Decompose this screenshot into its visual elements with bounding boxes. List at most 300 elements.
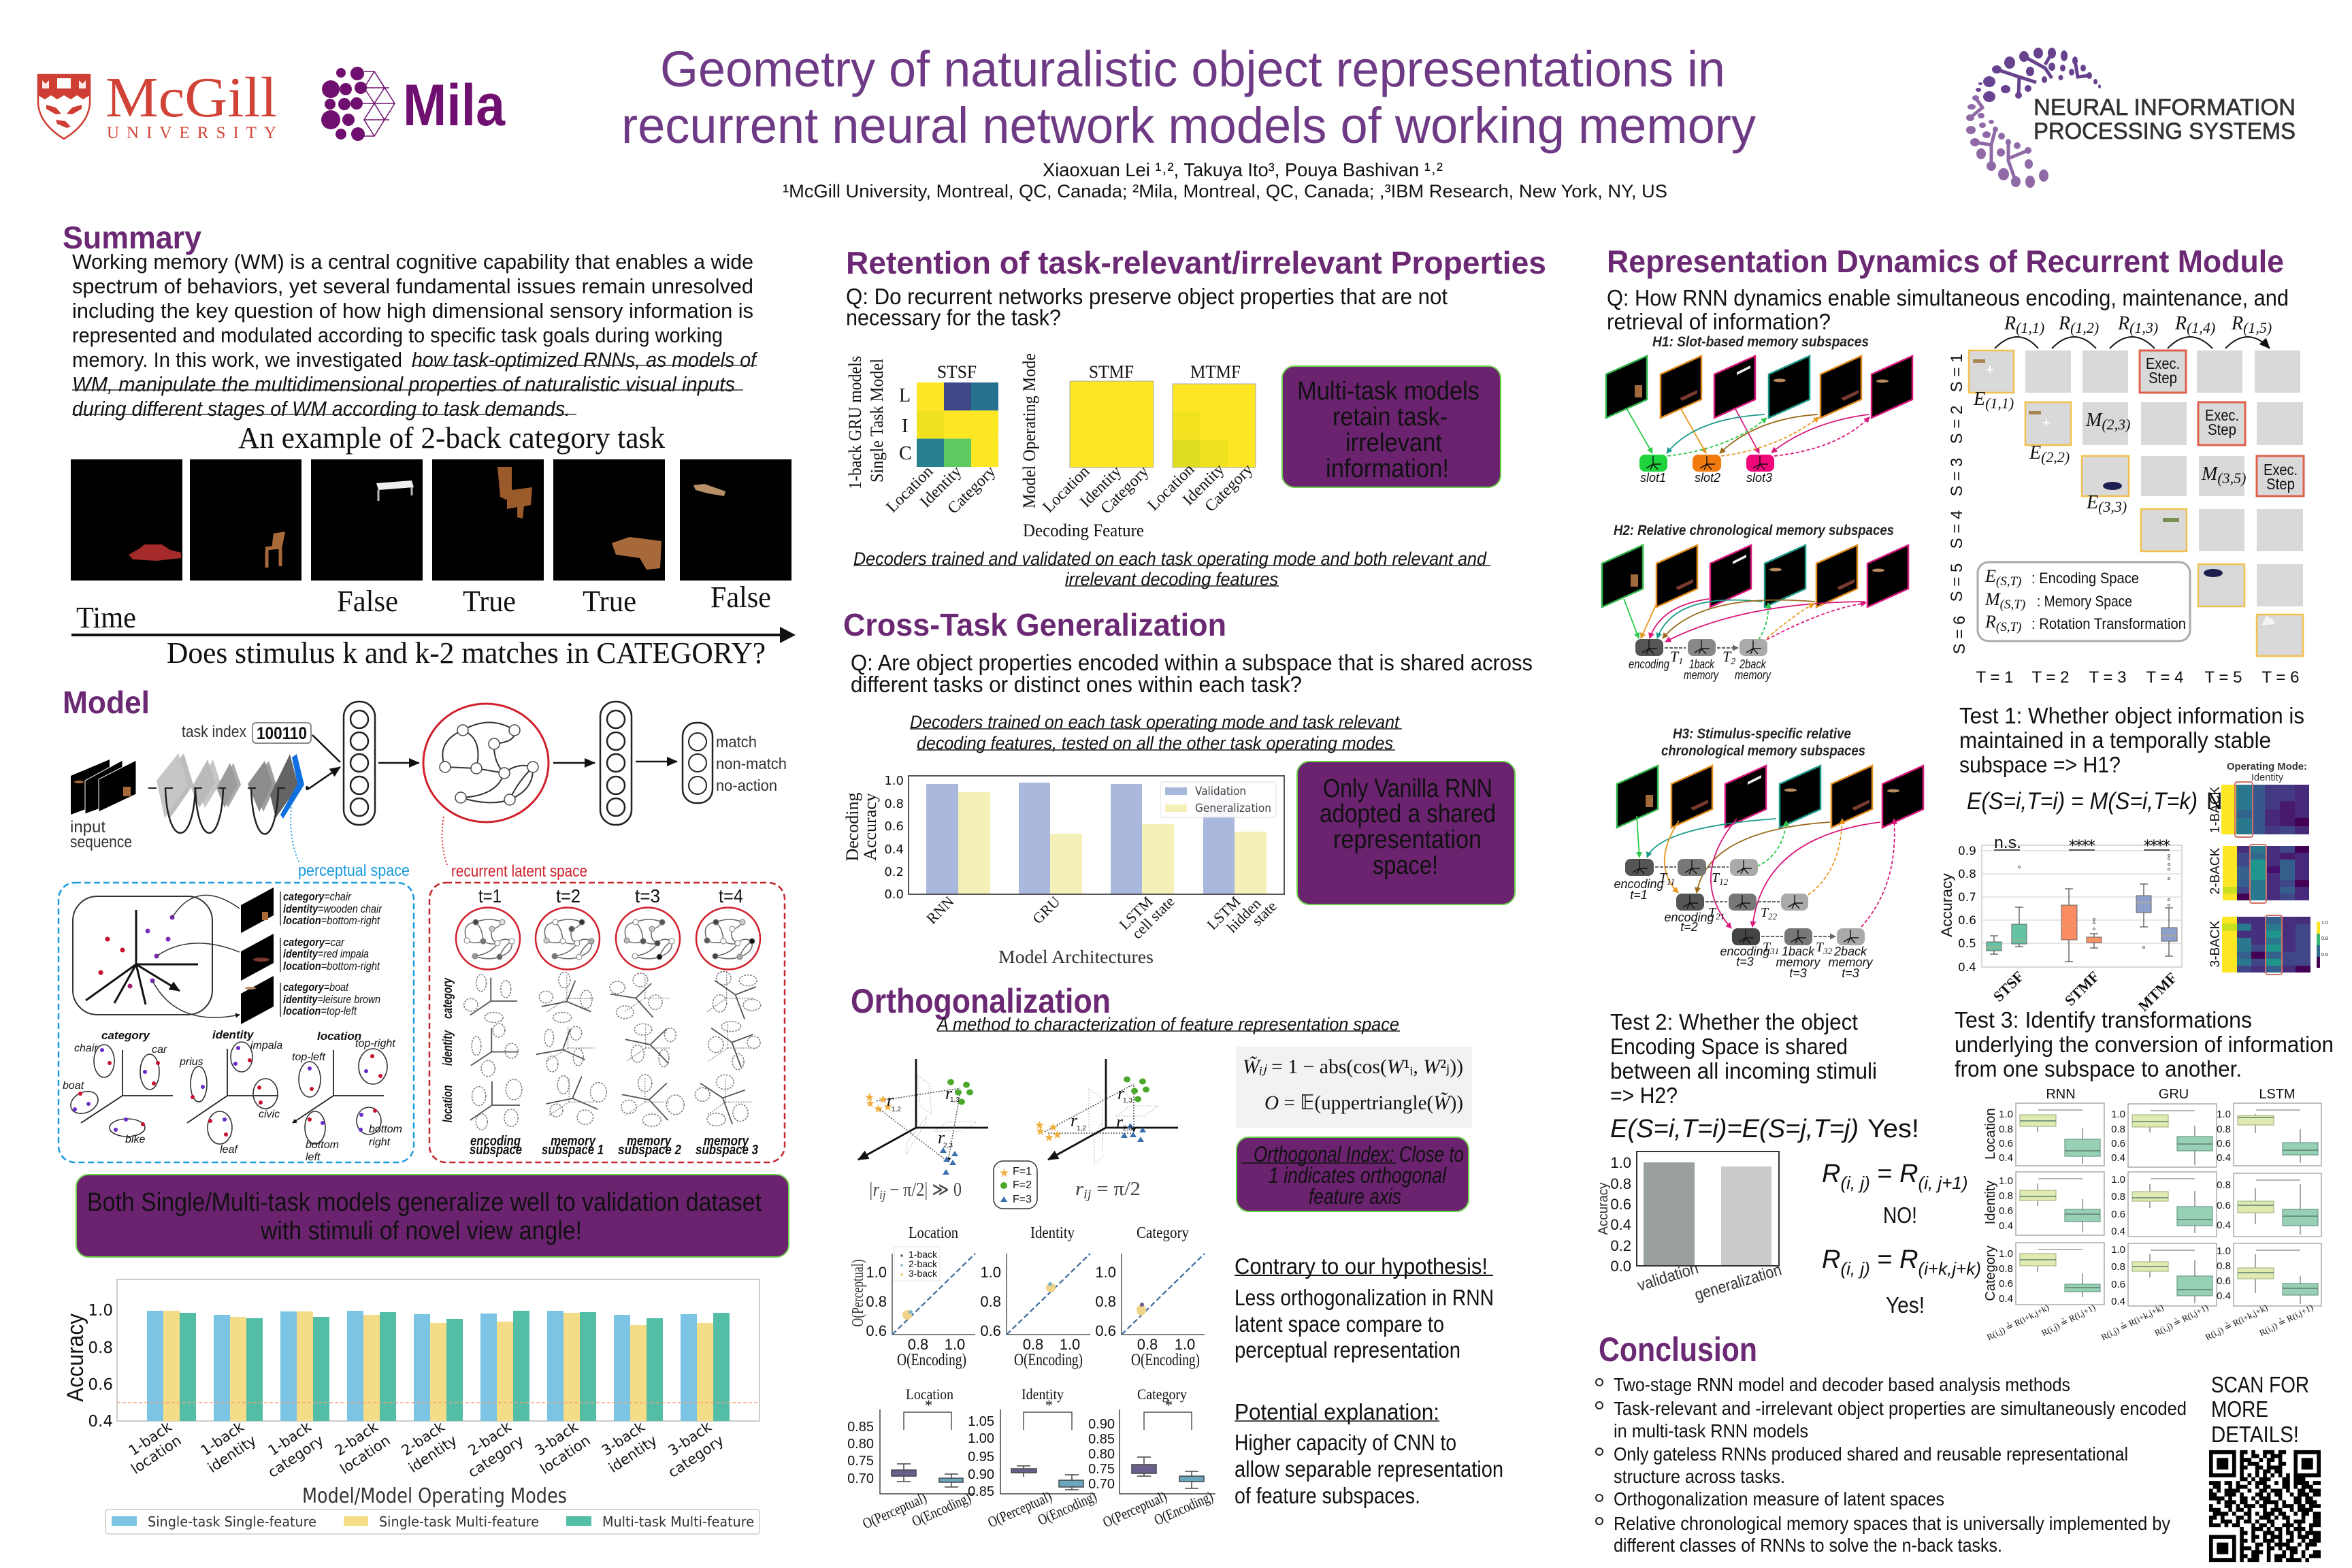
bar chart: validation vs generalization: 1.0 [1610,1154,1631,1171]
diagram: H2 relative chronological [1602,523,1908,682]
scatter plots: perceptual vs encoding: 0.8 [1023,1336,1043,1353]
box plots: perceptual vs encoding: 0.90 [968,1467,994,1482]
bar chart: accuracy by operating mode: category [265,1432,327,1481]
heatmaps: decoding per feature: Location [1040,463,1093,517]
time labels: T = 2 [2032,668,2069,687]
text block: summary body: represented and modulated according to specific task goals during working [72,323,723,347]
feature axes: category identity location: bike [125,1134,145,1145]
box plots: perceptual vs encoding: Identity [1022,1386,1064,1403]
bar chart: accuracy by operating mode: Model/Model Operating Modes [302,1484,567,1508]
bar chart: decoding accuracy by architecture: 0.6 [884,819,904,834]
formulas: rotation equalities [1822,1160,1981,1318]
bar chart: accuracy by operating mode [63,1279,760,1534]
bar chart: accuracy by operating mode: 2-back [399,1418,448,1459]
diagram: H1 slot-based: slot2 [1695,471,1720,485]
question: retention [846,284,1448,330]
callout: vanilla RNN: adopted a shared [1320,800,1496,828]
heatmap STSF [917,382,998,467]
QR code [2209,1452,2321,1560]
box plot grid: rotation transforms: R(i,j) ≟ R(i+k,j+k) [2204,1302,2269,1342]
box plots: perceptual vs encoding: 0.75 [1088,1462,1115,1477]
diagram: H3 stimulus-specific: 2back [1833,945,1867,958]
scatter plots: perceptual vs encoding: 1.0 [1060,1336,1080,1353]
text block: test 3: underlying the conversion of information [1955,1032,2334,1057]
feature axes: category identity location: location [317,1030,361,1043]
response labels and time arrow: Does stimulus k and k-2 matches in CATEGORY? [167,636,766,670]
diagram: H3 stimulus-specific: t=1 [1630,888,1648,902]
box plot grid: rotation transforms: R(i,j) ≟ R(i+k,j+k) [1985,1302,2051,1342]
diagram: non-orthogonal axes: ★ [864,1091,875,1104]
bar chart: validation vs generalization: 0.2 [1610,1237,1631,1254]
box plots: perceptual vs encoding: 0.90 [1088,1417,1115,1432]
scatter plots: perceptual vs encoding: 0.8 [866,1293,887,1310]
heading: example task: An example of 2-back category task [238,421,665,455]
diagram: H3 stimulus-specific: memory [1828,956,1873,969]
space labels: (2,3) [2102,416,2130,433]
bar chart: decoding accuracy by architecture: Decoding [843,792,862,862]
diagram: orthogonal axes: r [1075,1179,1083,1200]
heatmaps: decoding per feature: Decoding Feature [1023,521,1144,540]
heatmaps: decoding per feature: Model Operating Mode [1019,353,1039,508]
diagram: H3 stimulus-specific: T [1659,870,1667,885]
title [621,41,1756,154]
logo: Neural Information Processing Systems [1966,48,2296,188]
feature axes: category identity location: chair [74,1043,98,1054]
diagram: H2 relative chronological: memory [1735,668,1771,682]
task index: 100110 [257,724,307,743]
text block: potential explanation: Potential explanation: [1235,1399,1439,1424]
text block: summary body: spectrum of behaviors, yet several fundamental issues remain unresolved [72,274,753,298]
diagram: orthogonal axes: ★ [1048,1121,1058,1134]
output layer: match [716,733,757,751]
diagram: H3 stimulus-specific: encoding [1720,945,1770,958]
rotation labels [1995,313,2272,348]
heatmap 2-back [2223,846,2309,900]
box plot: temporal stability accuracy: 0.4 [1958,961,1976,975]
heatmaps: operating mode identity: Identity [2251,772,2283,783]
box plot grid: rotation transforms: Category [1983,1245,1998,1301]
panel: perceptual space: location=bottom-right [283,914,380,927]
rotation labels: R [2232,313,2243,334]
bar chart: accuracy by operating mode: identity [205,1432,259,1476]
bar chart: decoding accuracy by architecture: 0.2 [884,865,904,879]
space labels: (3,3) [2098,498,2127,515]
panel: recurrent latent space: t=4 [719,885,743,906]
scatter plots: perceptual vs encoding: O(Encoding) [897,1351,966,1369]
note: cross-task decoders: decoding features, tested on all the other task operating modes [917,733,1393,753]
panel: recurrent latent space: subspace [470,1143,522,1158]
box plot grid: rotation transforms [1983,1087,2321,1342]
bar chart: accuracy by operating mode: 3-back [532,1418,581,1459]
box plots: perceptual vs encoding: * [1045,1396,1053,1414]
diagram: H1 slot-based: slot3 [1746,471,1772,485]
conclusion bullets: Two-stage RNN model and decoder based analysis methods [1614,1374,2070,1395]
box plot grid: rotation transforms: 1.0 [2217,1109,2231,1120]
diagram: H3 stimulus-specific: 22 [1768,911,1778,921]
panel: recurrent latent space: t=1 [478,885,502,906]
note: decoders trained: irrelevant decoding features [1065,569,1278,589]
box plots: perceptual vs encoding: 0.85 [1088,1432,1115,1447]
logo: McGill University: McGill [105,66,277,129]
bar chart: decoding accuracy by architecture: RNN [923,893,958,927]
question: cross-task: Q: Are object properties encoded within a subspace that is shared across [851,650,1533,675]
diagram: non-orthogonal axes: 2,3 [943,1142,953,1149]
box plot grid: rotation transforms: 0.8 [2217,1179,2231,1191]
bar chart: accuracy by operating mode: location [537,1432,593,1477]
legend [105,1509,760,1534]
feature axes: category identity location: prius [179,1056,203,1068]
box plot grid: rotation transforms: 0.4 [1999,1220,2013,1232]
heading: Cross-Task Generalization: Cross-Task Generalization [843,607,1226,642]
bar chart: accuracy by operating mode: 1-back [126,1418,175,1459]
box plot grid: rotation transforms: 0.8 [2111,1261,2125,1273]
text block: test 1: Test 1: Whether object information is [1959,703,2304,728]
box plot: temporal stability accuracy: 0.7 [1958,891,1976,904]
heatmaps: operating mode identity [2208,761,2328,975]
diagram: orthogonal axes: = π/2 [1092,1179,1141,1200]
diagram: H3 stimulus-specific: T [1816,940,1823,955]
conclusion bullets: Only gateless RNNs produced shared and reusable representational [1614,1443,2128,1465]
scatter plots: perceptual vs encoding: O(Encoding) [1131,1351,1200,1369]
time labels: T = 1 [1976,668,2013,687]
heading: Summary: Summary [63,220,201,255]
text block: test 3 [1955,1007,2334,1081]
bar chart: accuracy by operating mode: 2-back [332,1418,381,1459]
time labels: T = 4 [2146,668,2183,687]
formulas: rotation equalities: = [1870,1245,1899,1274]
diagram: H3 stimulus-specific: T [1761,905,1768,920]
subspace geometry grid [464,971,761,1130]
panel: perceptual space [59,883,414,1163]
panel: recurrent latent space: t=3 [635,885,660,906]
bar chart: validation vs generalization: 0.6 [1610,1196,1631,1213]
callout: multi-task retain: retain task- [1333,403,1448,431]
space labels: (3,5) [2217,470,2246,487]
box plot grid: rotation transforms: 0.6 [1999,1138,2013,1149]
output layer [683,723,787,803]
note: decoders trained [853,549,1490,589]
panel: recurrent latent space: t=2 [556,885,581,906]
text block: test 3: from one subspace to another. [1955,1056,2242,1081]
panel: recurrent latent space: encoding [470,1134,521,1149]
feature axes: category identity location: category [101,1029,150,1042]
text block: summary body [72,250,758,421]
legend: F values: F=3 [1013,1194,1032,1205]
diagram: H3 stimulus-specific: memory [1776,956,1820,969]
callout: vanilla RNN: representation [1333,826,1482,854]
space legend: (S,T) [2000,598,2025,612]
diagram: H1 slot-based: H1: Slot-based memory subspaces [1652,334,1869,350]
callout: orthogonal index: feature axis [1309,1184,1401,1209]
bar chart: accuracy by operating mode: 2-back [466,1418,514,1459]
formula box: O = 𝔼(uppertriangle(W̃)) [1264,1092,1463,1114]
text block: contrary to hypothesis: Less orthogonalization in RNN [1235,1285,1494,1310]
diagram: H2 relative chronological: 2back [1739,657,1767,671]
panel: perceptual space: category=boat [283,981,349,994]
box plot grid: rotation transforms: 0.4 [2111,1152,2125,1164]
formula box: W̃ᵢⱼ = 1 − abs(cos(W¹ᵢ, W²ⱼ)) [1243,1056,1463,1078]
space labels: (1,1) [1985,395,2014,412]
diagram: orthogonal axes: ij [1083,1188,1092,1202]
scatter plots: perceptual vs encoding: Location [909,1224,958,1242]
box plot grid: rotation transforms: R(i,j) ≟ R(i,j+1) [2257,1302,2315,1338]
diagram: H2 relative chronological: T [1670,648,1678,665]
box plot grid: rotation transforms: 0.6 [1999,1205,2013,1217]
heatmaps: decoding per feature: Identity [1077,463,1125,511]
box plot: temporal stability accuracy: 0.8 [1958,868,1976,881]
heatmaps: decoding per feature: Category [945,463,999,517]
box plot grid: rotation transforms: 0.6 [2111,1279,2125,1290]
space legend: : Encoding Space [2031,570,2139,587]
space labels: E [2087,492,2098,513]
time labels: T = 3 [2089,668,2126,687]
scatter plots: perceptual vs encoding: 0.8 [980,1293,1001,1310]
box plot grid: rotation transforms: Location [1983,1108,1998,1160]
text block: potential explanation [1235,1399,1503,1508]
box plot: temporal stability accuracy: Accuracy [1938,873,1955,937]
box plot grid: rotation transforms: 0.8 [2111,1124,2125,1135]
note: cross-task decoders: Decoders trained on each task operating mode and task relevant [910,712,1400,732]
panel: recurrent latent space [429,883,785,1162]
box plots: perceptual vs encoding: 1.00 [968,1431,994,1446]
bar chart: decoding accuracy by architecture: 0.8 [884,797,904,811]
heatmaps: operating mode identity: 3-BACK [2208,920,2223,967]
bar chart: validation vs generalization: 0.4 [1610,1216,1631,1233]
box plot grid: rotation transforms: R(i,j) ≟ R(i+k,j+k) [2100,1302,2165,1342]
callout: multi-task retain: irrelevant [1345,429,1442,457]
diagram: non-orthogonal axes: |r [868,1179,881,1200]
affiliations: ¹McGill University, Montreal, QC, Canada; ²Mila, Montreal, QC, Canada; ,³IBM Research, New York, NY, US [783,181,1667,201]
latent network states t=1 to t=4 [456,908,760,969]
panel: perceptual space: identity=leisure brown [283,993,380,1006]
formulas: rotation equalities: R [1899,1160,1918,1188]
subheading: method: A method to characterization of feature representation space [936,1014,1399,1034]
diagram: H3 stimulus-specific: t=2 [1680,920,1698,934]
text block: summary body: Working memory (WM) is a central cognitive capability that enables a wide [72,250,753,274]
rotation labels: R [2059,313,2070,334]
legend: Generalization [1195,802,1271,815]
question: RNN dynamics: Q: How RNN dynamics enable simultaneous encoding, maintenance, and [1607,285,2289,310]
formulas: rotation equalities: R [1822,1245,1840,1274]
heatmaps: decoding per feature: Location [1145,461,1198,514]
text block: potential explanation: of feature subspaces. [1235,1483,1420,1508]
legend: F values: F=1 [1013,1166,1032,1177]
box plot grid: rotation transforms: 0.8 [2217,1124,2231,1135]
title: recurrent neural network models of working memory [621,97,1756,154]
text block: test 1: subspace => H1? [1959,752,2121,777]
diagram: H3 stimulus-specific: t=3 [1789,966,1807,980]
panel: recurrent latent space: memory [704,1134,749,1149]
formulas: rotation equalities: = [1870,1160,1899,1188]
scatter legend: 2-back [909,1258,938,1269]
response labels and time arrow: False [710,581,771,614]
callout: generalization: with stimuli of novel view angle! [260,1217,582,1245]
callout: orthogonal index [1237,1137,1469,1211]
box plot grid: rotation transforms: 0.8 [2217,1260,2231,1272]
space legend: R [1985,612,1996,632]
box plot grid: rotation transforms: 0.6 [2217,1138,2231,1149]
diagram: orthogonal axes: ★ [1052,1128,1062,1141]
input sequence: sequence [70,833,132,851]
diagram: H3 stimulus-specific: encoding [1664,911,1714,924]
bar chart: accuracy by operating mode: identity [606,1432,660,1476]
diagram: non-orthogonal axes: 1,2 [892,1106,901,1113]
box plot grid: rotation transforms: R(i,j) ≟ R(i,j+1) [2040,1302,2097,1338]
bar chart: decoding accuracy by architecture [843,774,1284,967]
scatter plots: perceptual vs encoding: O(Perceptual) [849,1259,867,1327]
legend: Single-task Multi-feature [379,1514,539,1530]
box plots: perceptual vs encoding: O(Encoding) [1035,1488,1099,1529]
box plot: temporal stability accuracy: **** [2069,838,2095,855]
heatmaps: decoding per feature: MTMF [1190,362,1241,382]
response labels and time arrow: True [583,585,636,618]
response labels and time arrow: True [463,585,516,618]
formulas: rotation equalities: Yes! [1886,1292,1925,1318]
box plot grid: rotation transforms: 1.0 [2217,1245,2231,1257]
space labels: (2,2) [2041,448,2070,466]
response labels and time arrow [71,581,796,670]
formulas: rotation equalities: R [1899,1245,1918,1274]
callout: generalization [76,1175,789,1257]
scatter plots: perceptual vs encoding: 0.6 [1095,1322,1116,1339]
scatter plots: perceptual vs encoding: 0.6 [980,1322,1001,1339]
conclusion bullets: Orthogonalization measure of latent spaces [1614,1488,1944,1509]
bars [147,1311,730,1421]
legend: F values: F=2 [1013,1179,1032,1191]
feature axes: category identity location: impala [250,1040,282,1051]
scan call to action: SCAN FOR [2211,1372,2309,1397]
authors: Xiaoxuan Lei ¹˒², Takuya Ito³, Pouya Bashivan ¹˒² [1043,159,1443,180]
scan call to action: DETAILS! [2211,1422,2299,1447]
text block: summary body: how task-optimized RNNs, as models of [412,348,758,372]
feature axes: category identity location: civic [259,1109,280,1120]
question: cross-task [851,650,1533,697]
box plot grid: rotation transforms: 0.8 [2111,1191,2125,1203]
bar chart: accuracy by operating mode: 3-back [599,1418,648,1459]
diagram: non-orthogonal axes: ★ [878,1093,888,1106]
scatter plots: perceptual vs encoding: 1.0 [945,1336,965,1353]
box plots: perceptual vs encoding: 0.70 [847,1471,874,1486]
callout: generalization: Both Single/Multi-task models generalize well to validation dataset [87,1188,762,1217]
logo: Mila: Mila [403,73,506,138]
panel: perceptual space: category=car [283,936,345,949]
box plots: perceptual vs encoding: 0.85 [847,1420,874,1435]
diagram: non-orthogonal axes: r [938,1128,945,1147]
space labels: E [2029,442,2041,463]
feature axes: category identity location: car [152,1044,167,1056]
feature axes: category identity location: left [306,1152,321,1163]
exec step labels: Step [2149,369,2177,387]
scatter plots: perceptual vs encoding: 1.0 [1175,1336,1195,1353]
box plots: perceptual vs encoding: Category [1137,1386,1187,1403]
box plot grid: rotation transforms: 0.4 [2217,1152,2231,1164]
recurrent latent space label [442,817,587,881]
time labels: T = 5 [2205,668,2242,687]
text block: contrary to hypothesis: Contrary to our hypothesis! [1235,1254,1488,1279]
question: cross-task: different tasks or distinct ones within each task? [851,672,1302,697]
box plot grid: rotation transforms: 0.8 [1999,1124,2013,1135]
diagram: H3 stimulus-specific: H3: Stimulus-specific relative [1673,726,1851,742]
output layer: non-match [716,755,787,772]
exec step labels [2146,355,2298,493]
bar chart: accuracy by operating mode: 3-back [666,1418,715,1459]
legend: Single-task Single-feature [148,1514,316,1530]
bar chart: accuracy by operating mode: 1-back [265,1418,314,1459]
formulas: rotation equalities: (i, j+1) [1918,1173,1968,1193]
panel: recurrent latent space: category [441,977,455,1019]
diagram: H2 relative chronological: 1back [1689,657,1715,671]
note: decoders trained: Decoders trained and validated on each task operating mode and both relevant and [853,549,1487,569]
stimulus labels: S = 1 [1948,354,1966,392]
space labels: M [2202,463,2217,485]
heatmaps: operating mode identity: Operating Mode: [2227,761,2307,772]
box plot: temporal stability accuracy: 0.5 [1958,937,1976,951]
feature axes: category identity location: identity [212,1028,255,1041]
feature axes: category identity location: bottom [369,1124,402,1135]
bar chart: accuracy by operating mode: 1-back [198,1418,247,1459]
bar chart: decoding accuracy by architecture: 0.0 [884,887,904,902]
box plot grid: rotation transforms: 0.4 [1999,1293,2013,1305]
output layer: no-action [716,777,777,794]
bar chart: accuracy by operating mode: category [465,1432,527,1481]
bar chart: accuracy by operating mode: category [665,1432,727,1481]
diagram: H2 relative chronological: encoding [1629,657,1669,671]
stimulus labels: S = 6 [1950,616,1969,654]
formulas: rotation equalities: (i, j) [1840,1173,1870,1193]
task index: task index [182,723,246,741]
perceptual space label: perceptual space [298,862,410,880]
box plot: temporal stability accuracy: MTMF [2135,969,2180,1015]
box plot grid: rotation transforms: 1.0 [2111,1174,2125,1186]
colorbar: 1.0 [2321,921,2328,926]
diagram: orthogonal axes: r [1117,1083,1125,1103]
heatmaps: decoding per feature: Category [1098,463,1152,517]
text block: summary body: memory. In this work, we investigated [72,348,402,372]
rotation labels: (1,3) [2129,319,2158,336]
text block: test 2: Test 2: Whether the object [1610,1009,1858,1034]
bar chart: decoding accuracy by architecture: GRU [1029,893,1064,927]
bar chart: validation vs generalization: 0.8 [1610,1175,1631,1192]
scatter plots: perceptual vs encoding: 0.8 [1095,1293,1116,1310]
conclusion bullets: structure across tasks. [1614,1466,1785,1487]
box plot grid: rotation transforms: 0.4 [2111,1296,2125,1307]
text block: test 1: maintained in a temporally stable [1959,728,2271,753]
colorbar: 0.8 [2321,936,2328,941]
stimulus labels: S = 3 [1948,458,1966,496]
grid cells [1969,350,2304,656]
feature axes: category identity location [63,1028,402,1163]
exec step labels: Exec. [2205,406,2239,424]
box plots: perceptual vs encoding: O(Perceptual) [1100,1488,1169,1531]
callout: multi-task retain: Multi-task models [1297,377,1480,406]
heatmap 3-back [2222,917,2310,973]
diagram: non-orthogonal axes: ij [879,1188,885,1203]
diagram: non-orthogonal axes: ★ [873,1102,883,1115]
bar chart: accuracy by operating mode: 1.0 [88,1302,113,1320]
diagram: H3 stimulus-specific: T [1712,870,1719,885]
legend: Validation [1195,785,1246,798]
feature axes: category identity location: leaf [220,1144,238,1156]
diagram: H1 slot-based [1606,334,1912,485]
box plots: perceptual vs encoding: 0.70 [1088,1477,1115,1492]
box plots: perceptual vs encoding: 0.80 [847,1437,874,1452]
scatter plots: perceptual vs encoding: 1.0 [866,1264,887,1281]
box plot grid: rotation transforms: 0.6 [2217,1200,2231,1211]
heatmaps: operating mode identity: 2-BACK [2208,847,2223,894]
bar chart: accuracy by operating mode: identity [406,1432,460,1476]
box plot grid: rotation transforms: R(i,j) ≟ R(i,j+1) [2153,1302,2210,1338]
panel: recurrent latent space: identity [441,1030,455,1066]
